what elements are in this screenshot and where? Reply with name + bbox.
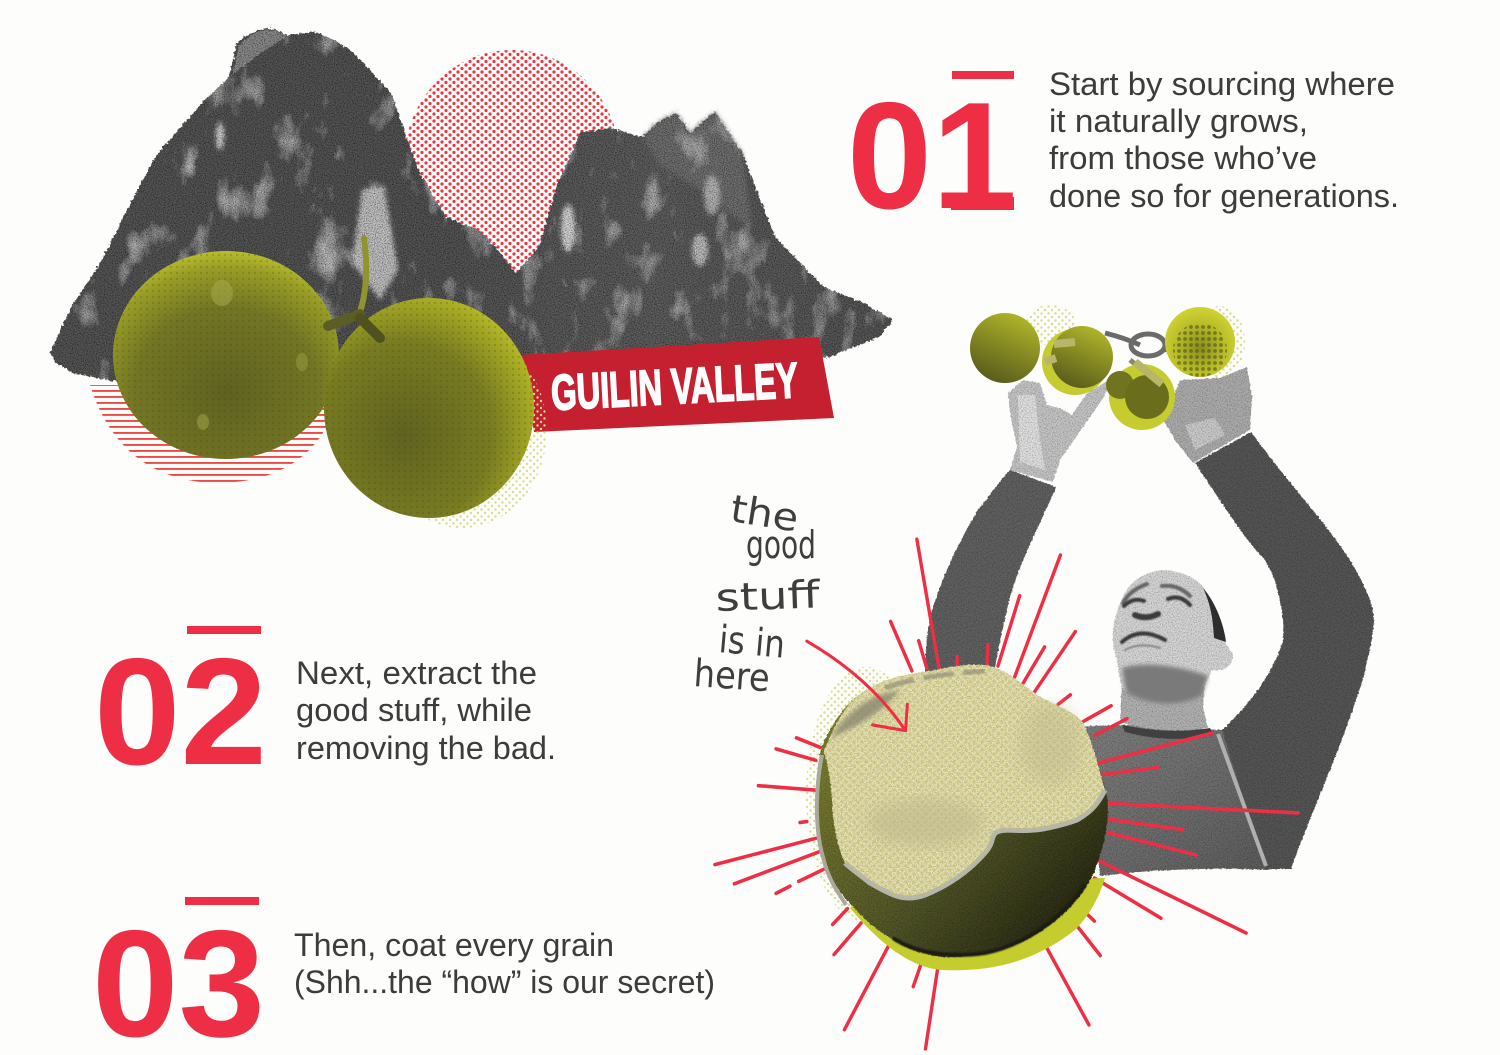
- text 03: (Shh...the “how” is our secret): [294, 964, 715, 1000]
- fruit halos: [1024, 305, 1076, 345]
- text 03: [294, 927, 715, 1000]
- flesh shading: [830, 671, 1080, 847]
- neck: [1120, 680, 1208, 730]
- right hand: [1163, 367, 1252, 463]
- step 01: [847, 66, 1399, 241]
- shell: [817, 664, 1108, 957]
- right fruit: [324, 298, 534, 518]
- step 02: [94, 626, 556, 797]
- text 02: removing the bad.: [296, 730, 556, 766]
- handwritten note: here: [692, 651, 771, 700]
- dotted red sun: [404, 50, 620, 274]
- striped red circle: [90, 385, 330, 483]
- flesh dots: [824, 664, 1105, 898]
- number 02: 02: [94, 627, 267, 797]
- label: Guilin Valley: [520, 337, 834, 432]
- text 01: done so for generations.: [1049, 178, 1399, 214]
- under-chin shadow: [1122, 665, 1208, 703]
- text 02: [296, 655, 556, 766]
- left fruit: [113, 251, 339, 459]
- hair: [1203, 588, 1226, 642]
- handwritten note: stuff: [715, 572, 821, 620]
- torso: [1085, 725, 1270, 876]
- text 01: Start by sourcing where: [1049, 66, 1395, 102]
- text 03: Then, coat every grain: [294, 927, 614, 963]
- right sleeve: [1195, 432, 1374, 869]
- lime crescent: [850, 878, 1105, 970]
- flesh: [824, 664, 1105, 898]
- label text: GUILIN VALLEY: [550, 352, 799, 421]
- head: [1113, 570, 1233, 703]
- flesh rim: [845, 790, 1105, 898]
- burst rays: [715, 539, 1298, 1049]
- handle pieces: [1045, 342, 1162, 384]
- number 01: 01: [847, 71, 1017, 241]
- fruit pair: [113, 238, 534, 518]
- rope: [1218, 734, 1266, 866]
- halftone behind coconut: [806, 667, 926, 923]
- left hand: [1008, 378, 1113, 482]
- man holding fruit: [925, 305, 1374, 876]
- text 02: good stuff, while: [296, 692, 532, 728]
- held fruits: [970, 307, 1235, 430]
- bottom shadow edge: [893, 885, 1085, 955]
- handwritten note: good: [746, 523, 816, 567]
- handwritten note: the: [728, 486, 802, 541]
- left rim: [817, 755, 846, 905]
- left sleeve: [925, 470, 1056, 672]
- halftone under fruit: [377, 332, 547, 528]
- text 01: it naturally grows,: [1049, 103, 1308, 139]
- stems: [328, 238, 380, 338]
- text 02: Next, extract the: [296, 655, 537, 691]
- handwritten note: is in: [717, 617, 787, 667]
- step 03: [92, 897, 715, 1055]
- shirt collar: [1122, 725, 1213, 739]
- handle and ropes: [1105, 333, 1166, 385]
- text 01: from those who’ve: [1049, 140, 1317, 176]
- coconut: [817, 664, 1108, 957]
- handwritten note: [692, 486, 821, 700]
- text 01: [1049, 66, 1399, 214]
- mountain range: [50, 28, 893, 382]
- arrow: [807, 641, 907, 731]
- facial features: [1122, 584, 1190, 650]
